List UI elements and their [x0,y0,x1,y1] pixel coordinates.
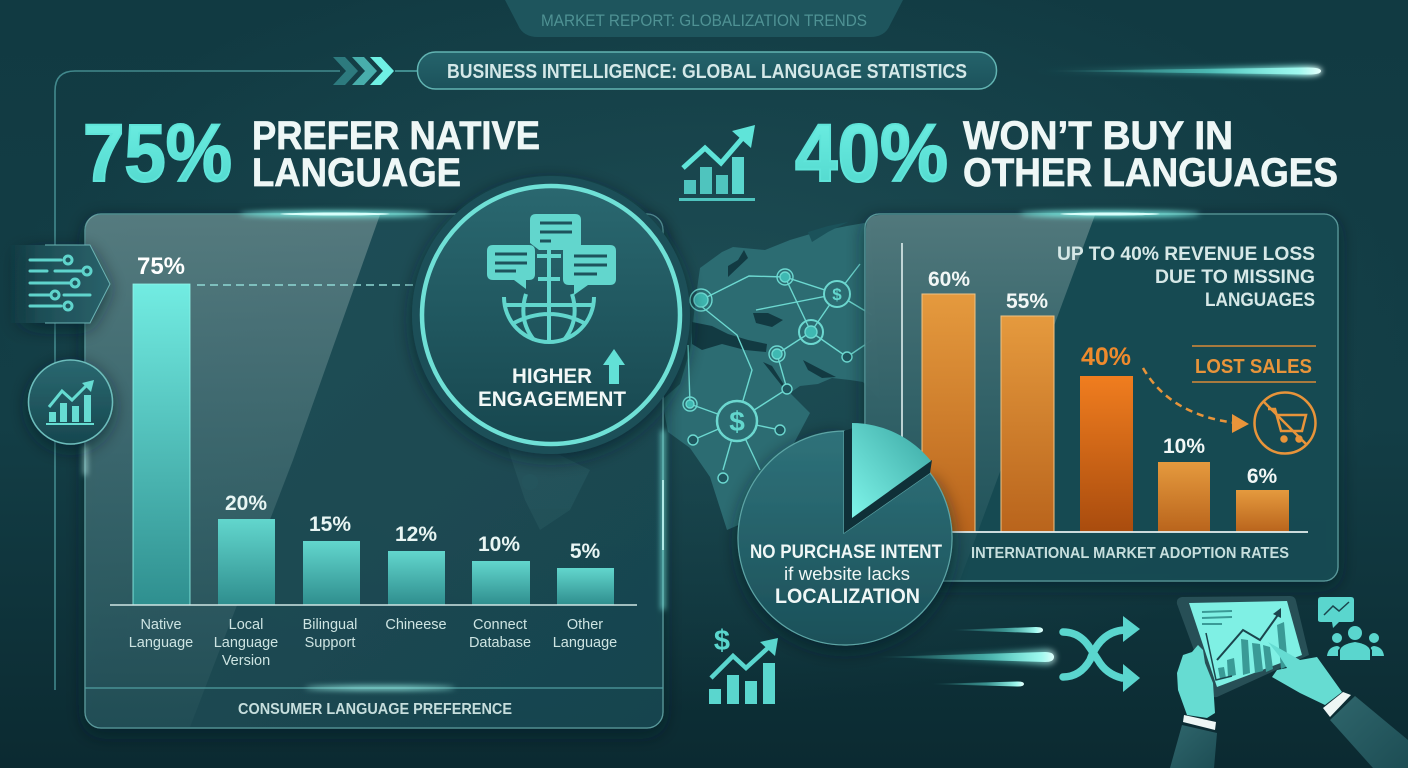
icon tag: settings sliders [10,245,110,323]
headline: 40% won't buy in other languages [795,108,1338,199]
icon badge: bar chart circle [28,360,112,444]
top tab: market report: MARKET REPORT: GLOBALIZATION TRENDS [541,12,867,30]
icon: no shopping cart [1254,392,1316,454]
bar chart: language preference: Local [229,617,263,633]
panel: international market adoption [865,211,1338,581]
header pill: BUSINESS INTELLIGENCE: GLOBAL LANGUAGE STATISTICS [447,61,967,83]
bar chart: language preference: 15% [309,513,351,536]
bar chart: language preference [110,253,637,669]
panel: consumer language preference [84,211,664,728]
top tab: market report [505,0,903,37]
icon: dollar growth chart [709,625,778,704]
bar chart: language preference: Connect [473,617,527,633]
world map background: $ [832,285,842,304]
callout: revenue loss: LANGUAGES [1205,290,1315,311]
bar chart: language preference: Other [567,617,603,633]
callout: revenue loss [1057,244,1315,311]
bar chart: language preference: Bilingual [303,617,357,633]
headline: 40% won't buy in other languages: WON’T BUY IN [963,114,1233,158]
callout: lost sales [1192,346,1316,382]
bar chart: adoption rates: 60% [928,268,970,291]
pie chart: no purchase intent [738,423,952,645]
world map background [662,222,880,530]
bar chart: adoption rates: 55% [1006,290,1048,313]
pie text: NO PURCHASE INTENT [750,542,942,563]
icon: chat bubbles over globe [487,214,616,342]
map network nodes [683,264,872,483]
bar chart: language preference: 10% [478,533,520,556]
icon: dollar growth chart: $ [714,625,730,657]
pie slice highlighted [852,423,931,518]
ghost continent in panel [505,440,590,530]
bar chart: language preference: Language [214,635,278,651]
frame line with chevrons [55,57,417,690]
bar chart: language preference: Language [553,635,617,651]
pie text: LOCALIZATION [775,585,920,608]
headline: 75% prefer native language: PREFER NATIVE [252,114,540,158]
callout: higher engagement circle [412,176,690,454]
bar chart: language preference: 12% [395,523,437,546]
bar chart: language preference: 20% [225,492,267,515]
bar chart: language preference: 75% [137,253,185,280]
callout: lost sales: LOST SALES [1195,356,1312,378]
pie text: if website lacks [784,564,910,584]
headline: 75% prefer native language [83,108,540,199]
panel caption: INTERNATIONAL MARKET ADOPTION RATES [971,545,1289,562]
text: higher engagement: ENGAGEMENT [478,388,626,411]
icon: shuffle arrows [1063,616,1140,692]
arrow: dashed to lost sales [1143,368,1249,433]
bar chart: adoption rates: 6% [1247,465,1277,488]
bar chart: language preference: Chineese [385,617,447,633]
callout: revenue loss: DUE TO MISSING [1155,267,1315,288]
panel caption: CONSUMER LANGUAGE PREFERENCE [238,701,512,718]
bar chart: language preference: 5% [570,540,600,563]
glowing streak top right [1025,66,1322,76]
text: higher engagement: HIGHER [512,365,592,388]
bar chart: adoption rates: 40% [1081,343,1131,371]
icon: team with chart bubble [1318,597,1384,660]
text: higher engagement [478,365,626,411]
bar chart: language preference: Native [140,617,182,633]
bar chart: language preference: Database [469,635,531,651]
header pill [418,52,996,89]
world map background: $ [729,406,745,437]
pie text [750,542,942,608]
icon: growth chart center top [679,125,755,201]
headline: 75% prefer native language: 75% [83,108,232,199]
bar chart: language preference: Support [305,635,355,651]
glowing speed streaks [875,627,1056,686]
headline: 40% won't buy in other languages: 40% [795,108,948,199]
bar chart: language preference: Language [129,635,193,651]
icon: up arrow [603,349,625,384]
bar chart: language preference: Version [222,653,270,669]
bar chart: adoption rates: 10% [1163,435,1205,458]
bar chart: adoption rates [900,268,1308,532]
headline: 40% won't buy in other languages: OTHER LANGUAGES [963,151,1338,195]
callout: revenue loss: UP TO 40% REVENUE LOSS [1057,244,1315,265]
headline: 75% prefer native language: LANGUAGE [252,151,461,195]
illustration: hands holding tablet [1170,596,1408,768]
dashed leader line [197,284,415,286]
